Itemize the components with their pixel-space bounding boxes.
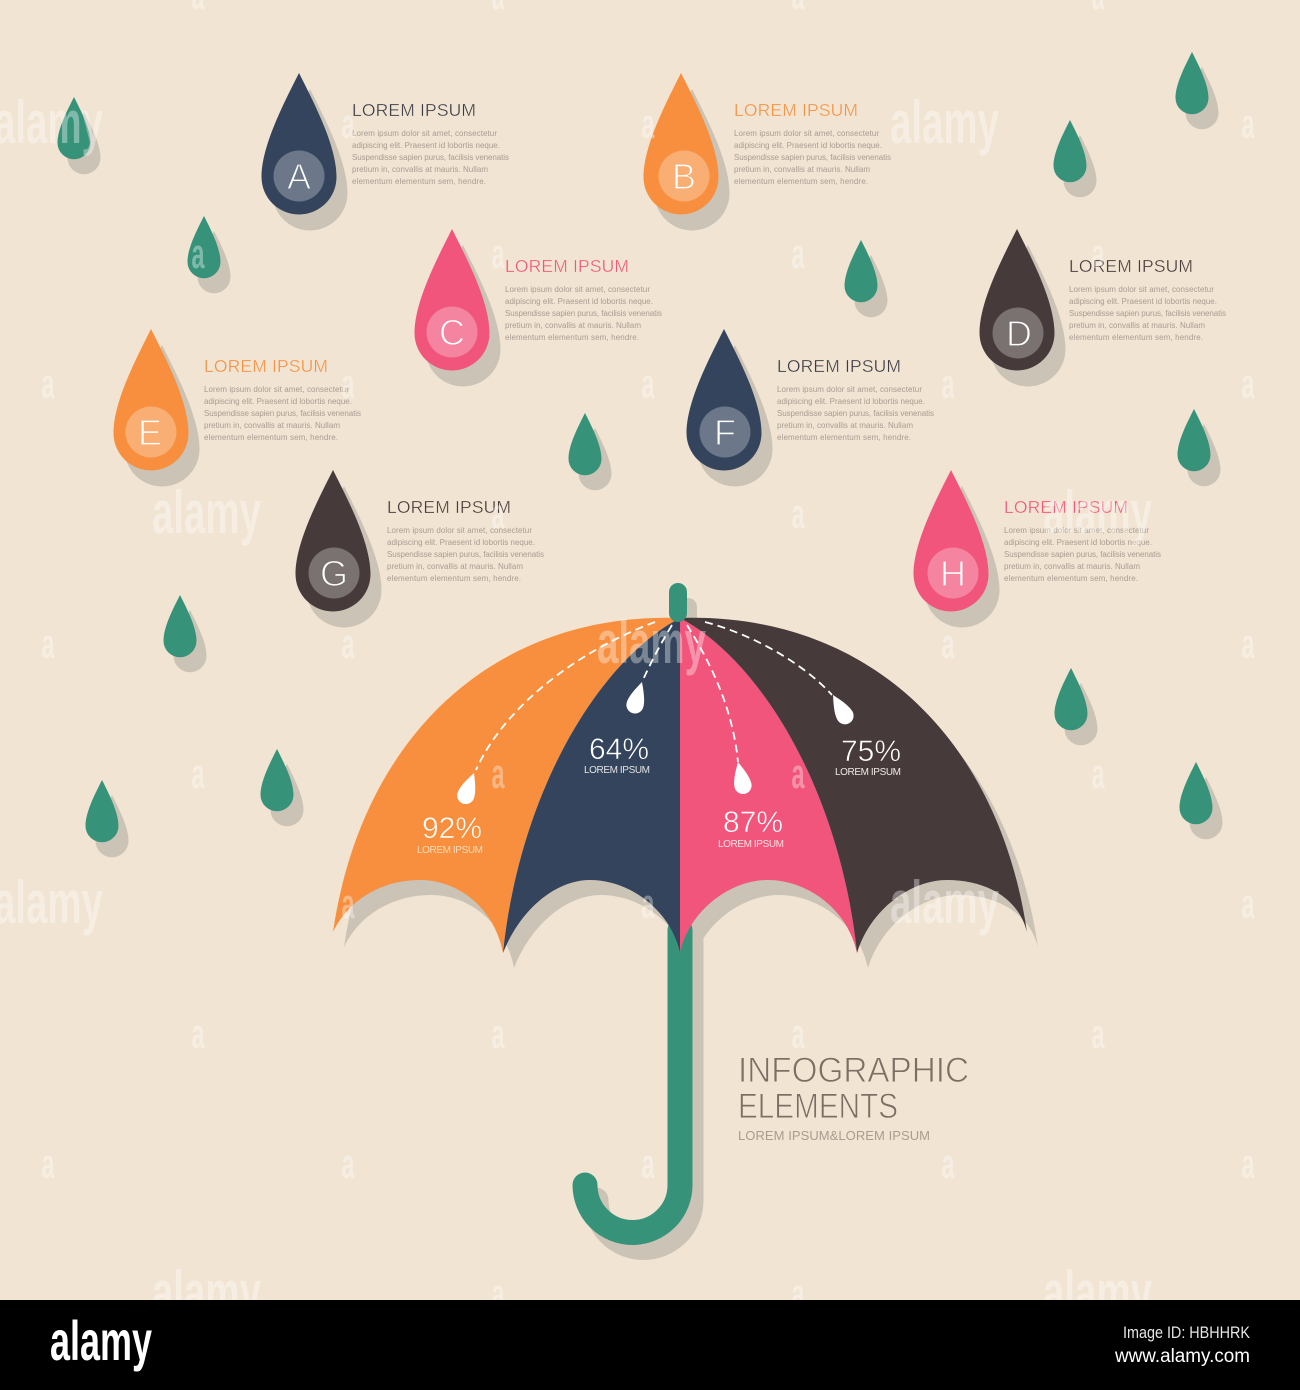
watermark pattern: alamy (890, 89, 999, 156)
stat 87%: LOREM IPSUM (718, 839, 784, 850)
watermark pattern: a (42, 360, 55, 407)
footer image id: Image ID: HBHHRK (1123, 1323, 1251, 1342)
drop F: F (714, 412, 736, 453)
title block (738, 1051, 969, 1143)
drop E: E (138, 412, 162, 453)
small green rain drops (58, 52, 1222, 857)
text block D: adipiscing elit. Praesent id lobortis neque. (1069, 297, 1217, 306)
white marker drops (455, 679, 857, 807)
watermark pattern: a (492, 750, 505, 797)
text block G: pretium in, convallis at mauris. Nullam (387, 562, 523, 571)
text block A: Suspendisse sapien purus, facilisis venenatis (352, 153, 509, 162)
watermark pattern: alamy (597, 609, 706, 676)
umbrella handle shadow (596, 940, 691, 1248)
watermark pattern: a (192, 230, 205, 277)
watermark pattern: a (192, 1010, 205, 1057)
text block E: Suspendisse sapien purus, facilisis venenatis (204, 409, 361, 418)
text block B: Lorem ipsum dolor sit amet, consectetur (734, 129, 879, 138)
title block: ELEMENTS (738, 1087, 898, 1126)
text block B: LOREM IPSUM (734, 100, 858, 120)
text block A: LOREM IPSUM (352, 100, 476, 120)
drop G (296, 470, 382, 628)
watermark pattern: a (942, 620, 955, 667)
drop D (980, 229, 1066, 386)
watermark pattern: a (492, 1010, 505, 1057)
text block E: pretium in, convallis at mauris. Nullam (204, 421, 340, 430)
dashed connectors (476, 622, 832, 770)
watermark pattern: a (1242, 620, 1255, 667)
canopy panel: pink (680, 618, 857, 953)
text block C: LOREM IPSUM (505, 256, 629, 276)
watermark pattern: a (942, 1140, 955, 1187)
text block A: adipiscing elit. Praesent id lobortis neque. (352, 141, 500, 150)
text block G: adipiscing elit. Praesent id lobortis neque. (387, 538, 535, 547)
watermark pattern: a (492, 1270, 505, 1317)
text block B: adipiscing elit. Praesent id lobortis neque. (734, 141, 882, 150)
umbrella canopy shadow (344, 633, 1038, 968)
watermark pattern: a (42, 1140, 55, 1187)
watermark pattern: a (342, 360, 355, 407)
title block: INFOGRAPHIC (738, 1051, 969, 1090)
drop C: C (439, 312, 465, 353)
text block A (352, 100, 509, 186)
watermark pattern: a (42, 620, 55, 667)
text block D: Suspendisse sapien purus, facilisis venenatis (1069, 309, 1226, 318)
watermark pattern: a (1092, 1010, 1105, 1057)
text block C: Lorem ipsum dolor sit amet, consectetur (505, 285, 650, 294)
drop G: G (320, 553, 348, 594)
watermark pattern: a (342, 880, 355, 927)
text block B: Suspendisse sapien purus, facilisis venenatis (734, 153, 891, 162)
watermark pattern: alamy (1043, 1259, 1152, 1326)
text block C: Suspendisse sapien purus, facilisis venenatis (505, 309, 662, 318)
text block F: elementum elementum sem, hendre. (777, 433, 911, 442)
text block D: LOREM IPSUM (1069, 256, 1193, 276)
text block D: pretium in, convallis at mauris. Nullam (1069, 321, 1205, 330)
text block B (734, 100, 891, 186)
text block H: pretium in, convallis at mauris. Nullam (1004, 562, 1140, 571)
drop H (914, 470, 1000, 628)
drop B: B (672, 156, 696, 197)
text block D: elementum elementum sem, hendre. (1069, 333, 1203, 342)
stat 64%: LOREM IPSUM (584, 765, 650, 776)
watermark pattern: a (792, 490, 805, 537)
text block C: adipiscing elit. Praesent id lobortis neque. (505, 297, 653, 306)
stat 92%: 92% (422, 812, 482, 845)
drop E (114, 329, 200, 486)
watermark pattern: a (1242, 880, 1255, 927)
text block D: Lorem ipsum dolor sit amet, consectetur (1069, 285, 1214, 294)
canopy panel: dark brown (680, 618, 1027, 953)
text block E: elementum elementum sem, hendre. (204, 433, 338, 442)
text block H: Lorem ipsum dolor sit amet, consectetur (1004, 526, 1149, 535)
drop C (414, 229, 500, 386)
stat 64% (584, 733, 650, 776)
text block H (1004, 497, 1161, 583)
text block E: LOREM IPSUM (204, 356, 328, 376)
watermark pattern: a (792, 750, 805, 797)
text block H: adipiscing elit. Praesent id lobortis neque. (1004, 538, 1152, 547)
text block F: pretium in, convallis at mauris. Nullam (777, 421, 913, 430)
text block G: Lorem ipsum dolor sit amet, consectetur (387, 526, 532, 535)
watermark pattern: a (642, 360, 655, 407)
watermark pattern: a (342, 1140, 355, 1187)
canopy panel: orange (333, 618, 680, 953)
watermark pattern: a (642, 1140, 655, 1187)
watermark pattern: alamy (1043, 479, 1152, 546)
watermark pattern: a (1092, 230, 1105, 277)
watermark pattern: alamy (890, 869, 999, 936)
drop A: A (287, 156, 311, 197)
text block E (204, 356, 361, 442)
text block E: adipiscing elit. Praesent id lobortis neque. (204, 397, 352, 406)
footer bar (0, 1300, 1300, 1390)
drop F (686, 329, 772, 486)
text block A: pretium in, convallis at mauris. Nullam (352, 165, 488, 174)
stat 92%: LOREM IPSUM (417, 845, 483, 856)
text block D (1069, 256, 1226, 342)
watermark pattern: a (342, 620, 355, 667)
text block B: pretium in, convallis at mauris. Nullam (734, 165, 870, 174)
watermark pattern: a (1242, 1140, 1255, 1187)
watermark pattern: alamy (152, 1259, 261, 1326)
stat 75%: 75% (841, 735, 901, 768)
umbrella (333, 583, 1038, 1248)
stat 64%: 64% (589, 733, 649, 766)
watermark pattern: a (942, 360, 955, 407)
watermark pattern: a (642, 100, 655, 147)
umbrella top knob shadow (679, 598, 697, 637)
drop H: H (940, 553, 966, 594)
drop A (262, 73, 348, 230)
text block F: adipiscing elit. Praesent id lobortis neque. (777, 397, 925, 406)
stat 75%: LOREM IPSUM (835, 767, 901, 778)
text block G: Suspendisse sapien purus, facilisis venenatis (387, 550, 544, 559)
watermark pattern: a (792, 1270, 805, 1317)
drop B (644, 73, 730, 230)
text block C (505, 256, 662, 342)
text block G: elementum elementum sem, hendre. (387, 574, 521, 583)
stat 87% (718, 806, 784, 850)
stat 92% (417, 812, 483, 856)
watermark pattern: a (1242, 360, 1255, 407)
text block H: Suspendisse sapien purus, facilisis venenatis (1004, 550, 1161, 559)
text block A: Lorem ipsum dolor sit amet, consectetur (352, 129, 497, 138)
text block H: elementum elementum sem, hendre. (1004, 574, 1138, 583)
footer url: www.alamy.com (1114, 1346, 1250, 1367)
drop D: D (1006, 313, 1032, 354)
text block F: LOREM IPSUM (777, 356, 901, 376)
text block E: Lorem ipsum dolor sit amet, consectetur (204, 385, 349, 394)
text block F: Suspendisse sapien purus, facilisis venenatis (777, 409, 934, 418)
text block B: elementum elementum sem, hendre. (734, 177, 868, 186)
stat 75% (835, 735, 901, 778)
watermark pattern: a (792, 230, 805, 277)
text block F: Lorem ipsum dolor sit amet, consectetur (777, 385, 922, 394)
watermark pattern: a (342, 100, 355, 147)
text block H: LOREM IPSUM (1004, 497, 1128, 517)
canopy panel: navy (503, 618, 680, 953)
text block A: elementum elementum sem, hendre. (352, 177, 486, 186)
footer logo: alamy (50, 1309, 152, 1372)
umbrella handle (585, 930, 680, 1232)
watermark pattern: a (492, 490, 505, 537)
watermark pattern: a (492, 230, 505, 277)
umbrella top knob (669, 583, 687, 622)
watermark pattern: a (642, 880, 655, 927)
text block C: pretium in, convallis at mauris. Nullam (505, 321, 641, 330)
watermark pattern: a (792, 1010, 805, 1057)
watermark pattern: a (192, 750, 205, 797)
watermark pattern: a (1092, 750, 1105, 797)
text block G (387, 497, 544, 583)
stat 87%: 87% (723, 806, 783, 839)
text block C: elementum elementum sem, hendre. (505, 333, 639, 342)
watermark pattern: alamy (152, 479, 261, 546)
text block F (777, 356, 934, 442)
watermark pattern: a (1242, 100, 1255, 147)
text block G: LOREM IPSUM (387, 497, 511, 517)
title block: LOREM IPSUM&LOREM IPSUM (738, 1128, 930, 1143)
